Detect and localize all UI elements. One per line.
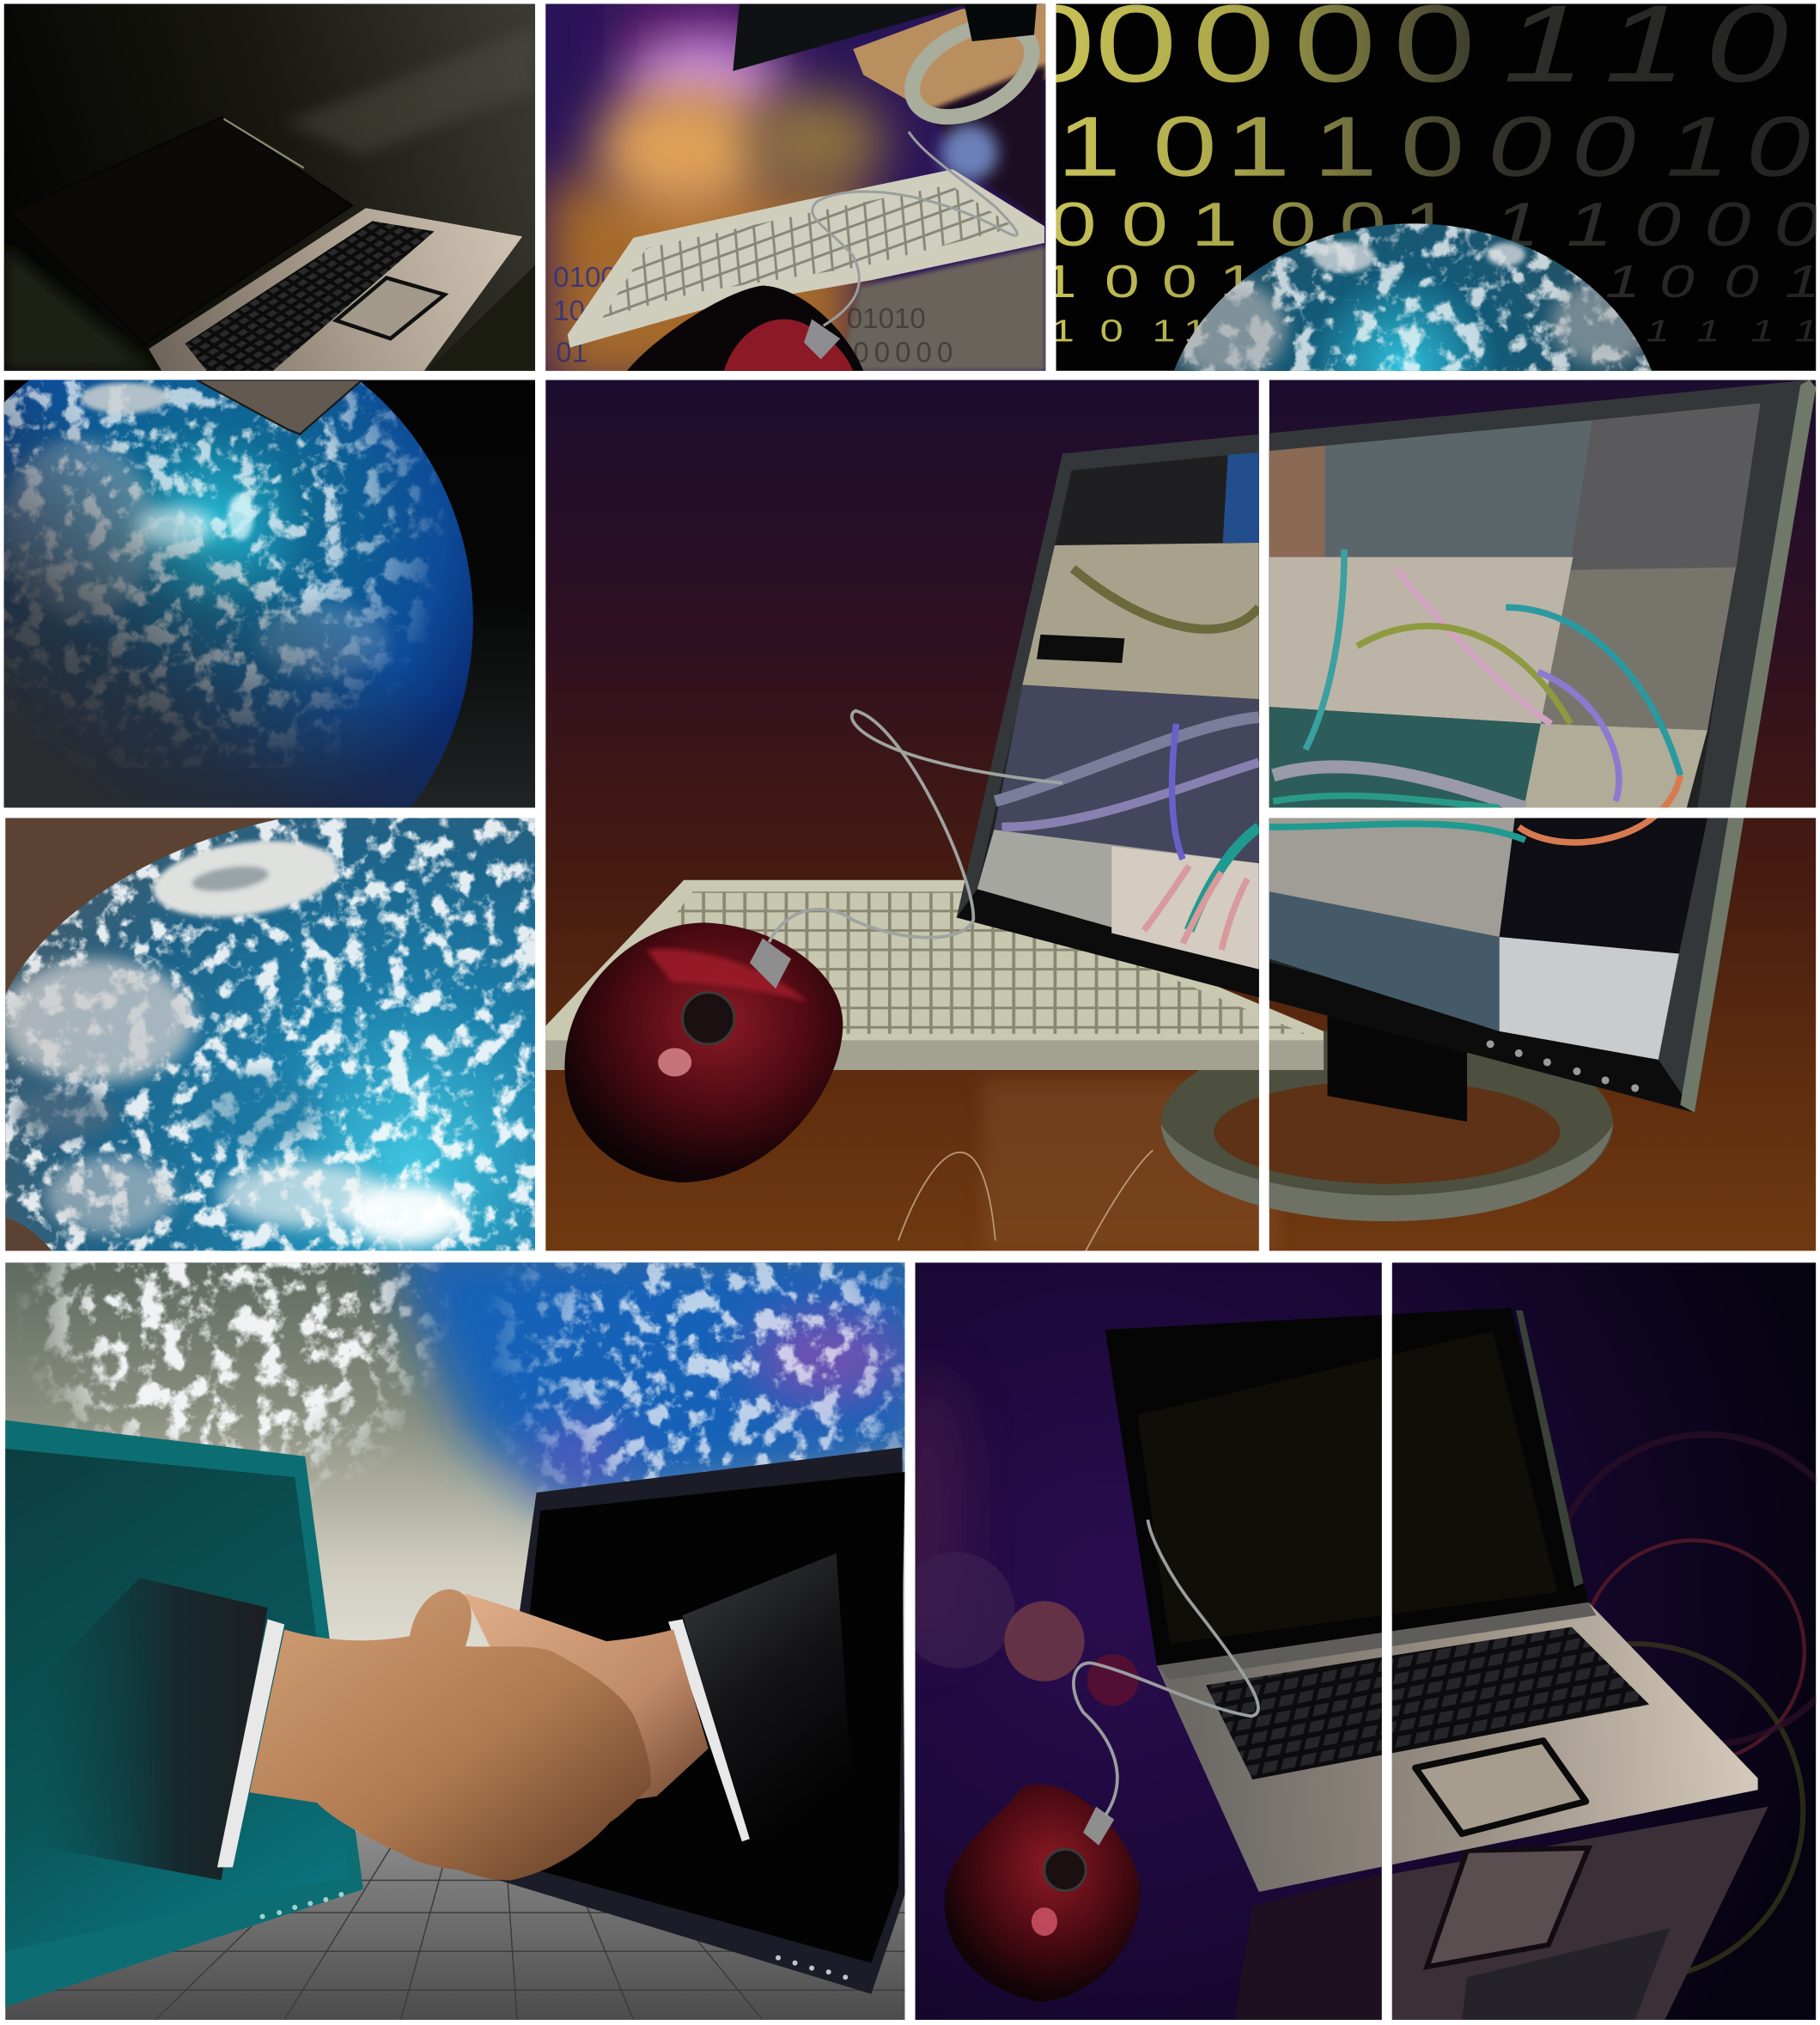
storm swirl [149,830,343,927]
laptop reflection [1234,1807,1768,2020]
mouse [564,922,843,1183]
binary text: 01010 [847,303,926,335]
binary text: 1010 [553,295,617,327]
mouse cable [1074,1520,1258,1815]
monitor stand [1160,995,1613,1221]
binary text [554,266,952,362]
binary rows: 10110 [1056,99,1464,195]
mouse [945,1785,1141,2002]
panel: laptop in dark room [4,4,535,371]
floor [5,1831,904,2020]
panel: handshake between monitors [5,1241,931,2020]
storm swirls [1313,241,1525,273]
earth [1160,220,1667,655]
binary text: 01 [556,337,587,368]
binary rows: 1001 [1605,255,1820,307]
panel: laptop and mouse on purple background [889,1262,1820,2020]
panel: binary digits and earth [1013,0,1820,655]
lens flares [889,1370,1820,1979]
panel: dark earth [0,368,535,834]
monitor buttons [1487,1040,1639,1092]
mouse [627,286,863,371]
right black monitor [482,1447,904,1994]
monitor buttons [776,1955,848,1979]
panel: keyboard and mouse with digital burst [545,4,1047,387]
binary rows: 1111 [1646,313,1817,349]
binary rows: 1001 [1042,255,1255,307]
left sleeve [35,1578,284,1880]
storm swirl [80,382,168,414]
binary text: 00000 [853,337,958,368]
keyboard reflection [983,1079,1280,1251]
colour burst [545,4,1047,387]
screen patches [977,403,1761,1060]
monitor [957,380,1816,1113]
right sleeve [668,1554,853,1841]
cable reflection [898,1150,1153,1251]
left teal monitor [5,1420,363,2007]
mouse cable [769,711,1062,942]
earth [0,814,543,1254]
binary rows [1013,0,1820,349]
wires [995,550,1680,950]
monitor buttons [260,1892,344,1919]
monitor corner [733,4,970,71]
laptop [125,117,522,371]
binary rows: 0010 [1488,99,1810,195]
binary rows: 1011 [1051,313,1207,349]
panel: close-up earth [0,814,543,1254]
cable lock [904,3,1039,125]
binary text: 0100 [553,262,617,294]
keyboard [568,169,1044,348]
laptop corner [197,380,362,435]
sky clouds [5,1241,931,1512]
binary rows: 11000 [1493,190,1820,259]
handshake [250,1590,709,1880]
keyboard [545,880,1324,1070]
laptop [1105,1308,1758,1892]
earth [0,368,478,834]
binary rows: 001001 [1050,190,1451,259]
panel: monitor, keyboard and mouse scene [545,380,1816,1251]
mouse cable [813,131,1017,325]
